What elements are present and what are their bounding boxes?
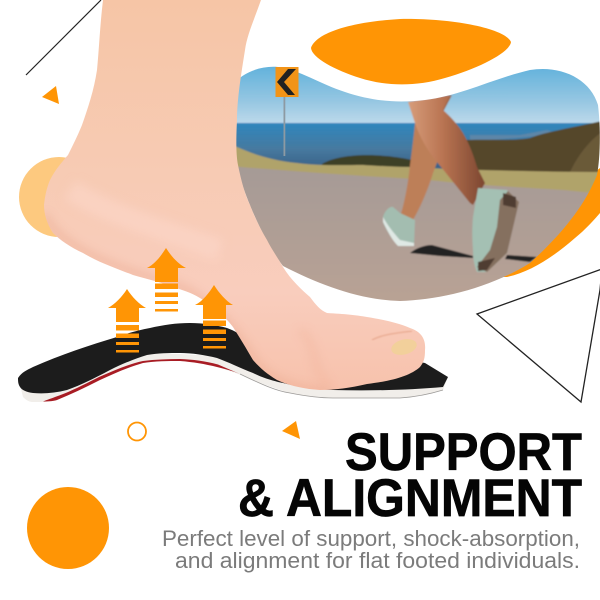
near hill xyxy=(322,154,412,168)
rear shoe xyxy=(383,207,415,246)
rear thigh xyxy=(442,94,452,112)
foot silhouette xyxy=(44,0,425,390)
description xyxy=(162,526,580,573)
description: and alignment for flat footed individuals. xyxy=(175,548,580,573)
sky xyxy=(236,66,600,124)
triangle: small orange xyxy=(282,421,300,439)
toe crease xyxy=(372,331,412,340)
road photo: runner xyxy=(220,60,600,305)
sign post xyxy=(284,96,285,156)
arrows: support xyxy=(108,248,233,352)
chevron xyxy=(277,69,296,95)
insole grey edge xyxy=(240,374,443,398)
orange blob: top xyxy=(311,19,511,84)
front leg xyxy=(408,95,485,205)
road sign xyxy=(276,67,298,156)
front shoe xyxy=(472,187,508,272)
road xyxy=(238,166,589,301)
circle outline: small orange xyxy=(128,422,146,440)
arrow middle xyxy=(147,248,186,312)
triangle outline: right xyxy=(477,269,600,402)
foot and leg xyxy=(44,0,425,392)
rear leg xyxy=(400,123,438,220)
arrow right xyxy=(195,285,233,348)
title: & ALIGNMENT xyxy=(238,469,582,528)
arrow left xyxy=(108,289,146,352)
foot shading xyxy=(44,190,330,392)
shoe sole xyxy=(477,191,519,272)
sole tread xyxy=(478,193,516,271)
circle: large orange xyxy=(27,487,109,569)
toenail xyxy=(390,337,418,357)
rear shoe white xyxy=(383,217,414,246)
sign plate xyxy=(276,67,298,97)
hills xyxy=(466,120,600,172)
title xyxy=(238,423,582,528)
shadow xyxy=(410,245,537,262)
decorative line: top left xyxy=(26,0,101,75)
hill light xyxy=(570,132,600,172)
circle: pale orange behind heel xyxy=(19,157,99,237)
title: SUPPORT xyxy=(345,423,582,482)
triangle: top left orange xyxy=(42,86,59,104)
description: Perfect level of support, shock-absorption, xyxy=(162,526,580,551)
insole red edge xyxy=(43,359,240,402)
insole xyxy=(18,323,448,402)
insole black top xyxy=(18,323,448,393)
insole white layer xyxy=(20,350,448,402)
orange crescent: right xyxy=(500,168,600,277)
grass xyxy=(236,146,598,194)
sea xyxy=(236,122,592,170)
far hill xyxy=(470,130,552,140)
